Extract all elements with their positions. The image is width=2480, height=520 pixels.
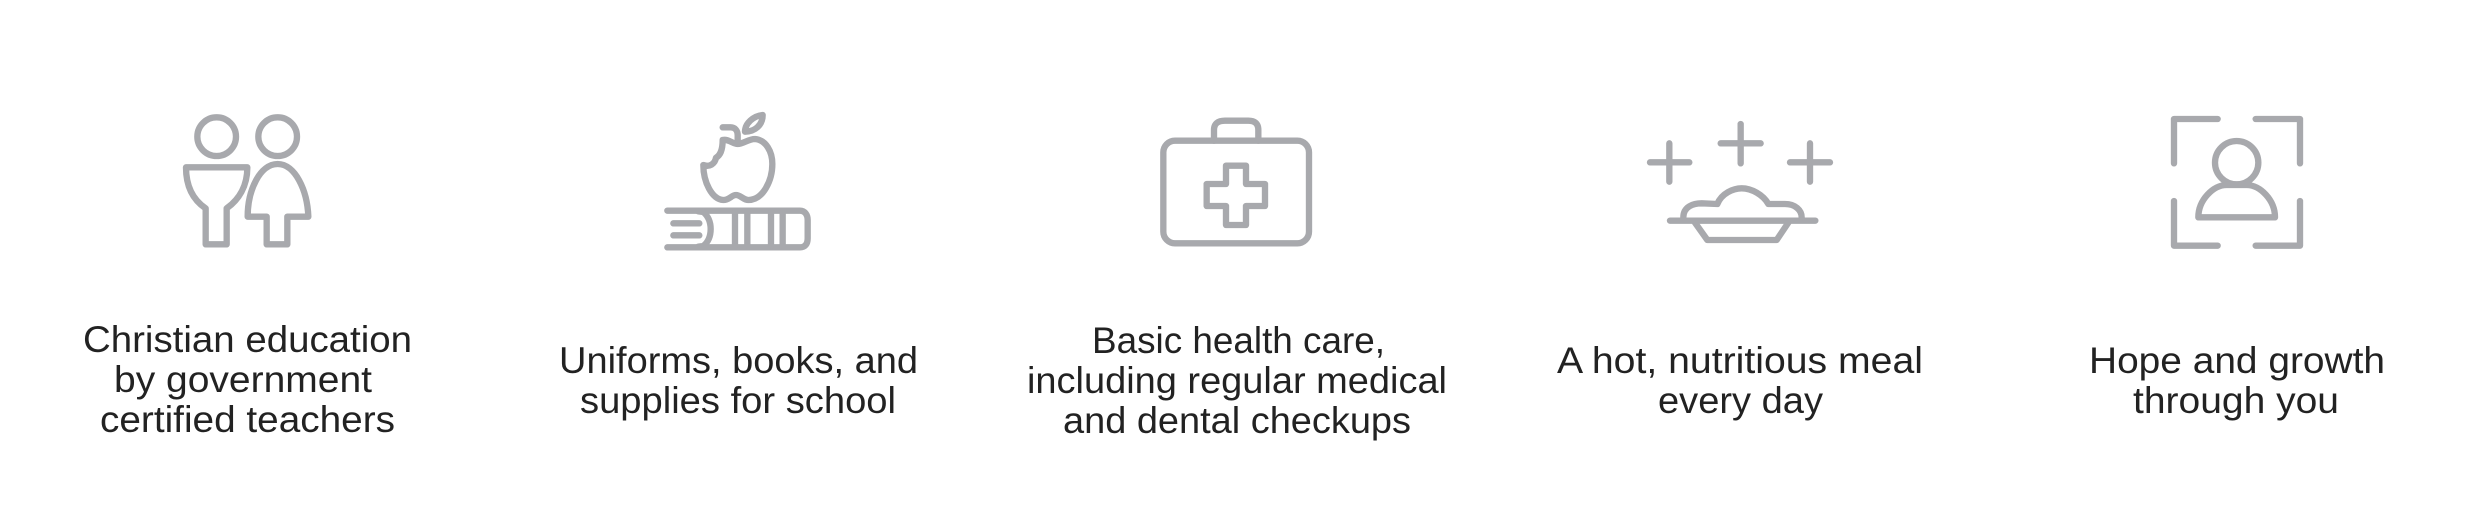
text: school supplies caption: supplies for school (580, 379, 896, 421)
icon: medical kit (1163, 121, 1309, 243)
text: hope and growth caption (2089, 339, 2385, 421)
panel: school supplies (559, 115, 918, 421)
text: hot meal caption: every day (1658, 379, 1823, 421)
text: Christian education caption: Christian education (83, 318, 412, 360)
panel: hot meal (1557, 124, 1923, 421)
panel: health care (1027, 121, 1447, 441)
panel: hope and growth (2089, 119, 2385, 421)
text: hot meal caption: A hot, nutritious meal (1557, 339, 1923, 381)
text: Christian education caption: by government (114, 358, 373, 400)
text: school supplies caption: Uniforms, books, and (559, 339, 918, 381)
icon: person in focus frame (2174, 119, 2300, 246)
text: Christian education caption: certified teachers (100, 398, 395, 440)
text: hot meal caption (1557, 339, 1923, 421)
text: school supplies caption (559, 339, 918, 421)
icon: apple on book (667, 115, 808, 247)
icon: two children (186, 117, 308, 244)
text: health care caption: including regular medical (1027, 359, 1447, 401)
text: health care caption (1027, 319, 1447, 441)
text: health care caption: and dental checkups (1063, 399, 1411, 441)
text: health care caption: Basic health care, (1092, 319, 1385, 361)
icon: steaming dish (1650, 124, 1830, 240)
text: hope and growth caption: Hope and growth (2089, 339, 2385, 381)
panel: Christian education (83, 117, 412, 440)
text: hope and growth caption: through you (2133, 379, 2339, 421)
text: Christian education caption (83, 318, 412, 440)
